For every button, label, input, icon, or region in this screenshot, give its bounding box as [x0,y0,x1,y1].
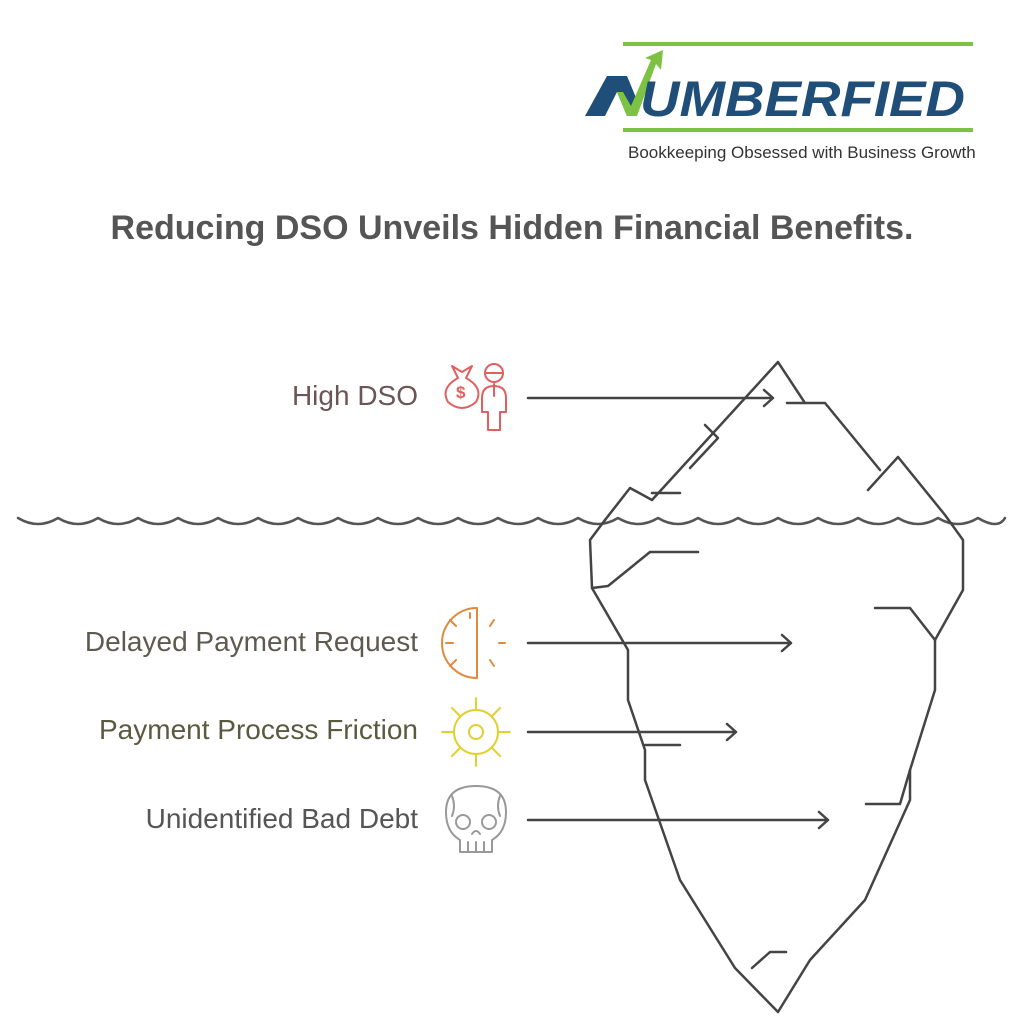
icon: money bag and person [446,364,506,430]
iceberg [590,362,963,1012]
label: High DSO: High DSO [292,380,418,411]
label: Payment Process Friction: Payment Process Friction [99,714,418,745]
icon: skull [446,786,506,852]
logo mark [585,50,663,116]
icon: sun [442,698,510,766]
label: Unidentified Bad Debt: Unidentified Bad Debt [146,803,418,834]
waterline [18,518,1005,524]
arrows [528,390,828,828]
icon: half clock [442,608,505,678]
logo bars [623,42,973,132]
logo wordmark: UMBERFIED [640,71,965,127]
logo [585,42,976,162]
tagline: Bookkeeping Obsessed with Business Growth [628,143,976,162]
icon: money bag and person: $ [456,383,466,402]
title: Reducing DSO Unveils Hidden Financial Benefits. [111,209,913,247]
label: Delayed Payment Request: Delayed Payment Request [85,626,418,657]
